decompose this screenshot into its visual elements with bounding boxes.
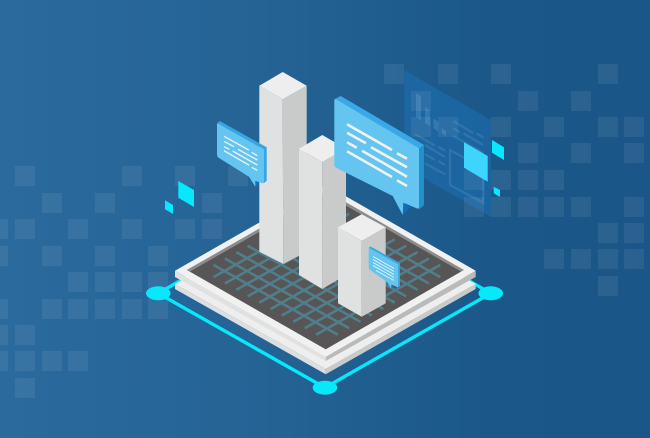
cyan floating tiles left: [165, 181, 194, 214]
cyan floating tiles right: [492, 140, 504, 197]
tall column: [259, 72, 307, 264]
translucent glass panel: [404, 70, 491, 217]
bubble text lines: [347, 124, 407, 186]
short column: [338, 214, 386, 317]
left speech bubble: [217, 121, 267, 187]
floor grid: [203, 201, 451, 341]
left bubble text lines: [224, 136, 257, 170]
platform: [175, 185, 476, 374]
upper plate: [175, 185, 476, 361]
dark floor: [187, 191, 464, 349]
lower plate: [175, 198, 476, 374]
small speech bubble: [369, 246, 400, 289]
panel highlight square: [464, 142, 488, 182]
background square pattern: [0, 64, 644, 398]
cyan base frame with nodes: [146, 197, 503, 395]
large speech bubble: [334, 96, 424, 215]
middle column: [299, 135, 346, 289]
small bubble text lines: [373, 256, 394, 280]
